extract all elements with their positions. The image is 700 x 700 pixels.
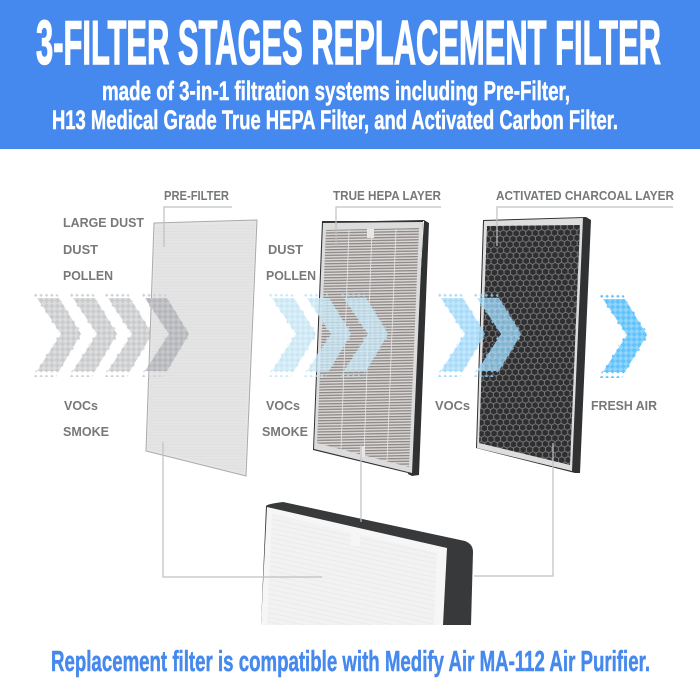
true HEPA filter (313, 220, 429, 476)
output label: FRESH AIR (591, 398, 658, 413)
column labels: ACTIVATED CHARCOAL LAYER (496, 188, 675, 203)
particles list: before pre-filter: SMOKE (63, 424, 109, 439)
gray chevrons before pre-filter (32, 292, 154, 377)
activated charcoal filter (476, 217, 591, 473)
particles list: before pre-filter: LARGE DUST (63, 215, 144, 230)
particles list: before pre-filter (63, 215, 144, 439)
subtitle (52, 76, 618, 135)
particles list: before charcoal: VOCs (435, 398, 470, 413)
particles list: before pre-filter: POLLEN (63, 268, 113, 283)
close-up of filter (261, 502, 473, 625)
particles list: before pre-filter: DUST (63, 242, 98, 257)
fresh air chevron (598, 293, 649, 378)
particles list: before HEPA (262, 242, 316, 439)
pre-filter panel (146, 220, 257, 476)
particles list: before HEPA: VOCs (266, 398, 300, 413)
leader lines (163, 207, 673, 577)
blue chevrons (267, 292, 523, 377)
particles list: before HEPA: DUST (268, 242, 303, 257)
particles list: before HEPA: SMOKE (262, 424, 308, 439)
column labels (164, 188, 675, 203)
column labels: PRE-FILTER (164, 188, 230, 203)
chevron overlapping pre-filter (140, 292, 191, 377)
header banner (0, 0, 700, 149)
column labels: TRUE HEPA LAYER (333, 188, 442, 203)
particles list: before HEPA: POLLEN (266, 268, 316, 283)
particles list: before pre-filter: VOCs (64, 398, 98, 413)
